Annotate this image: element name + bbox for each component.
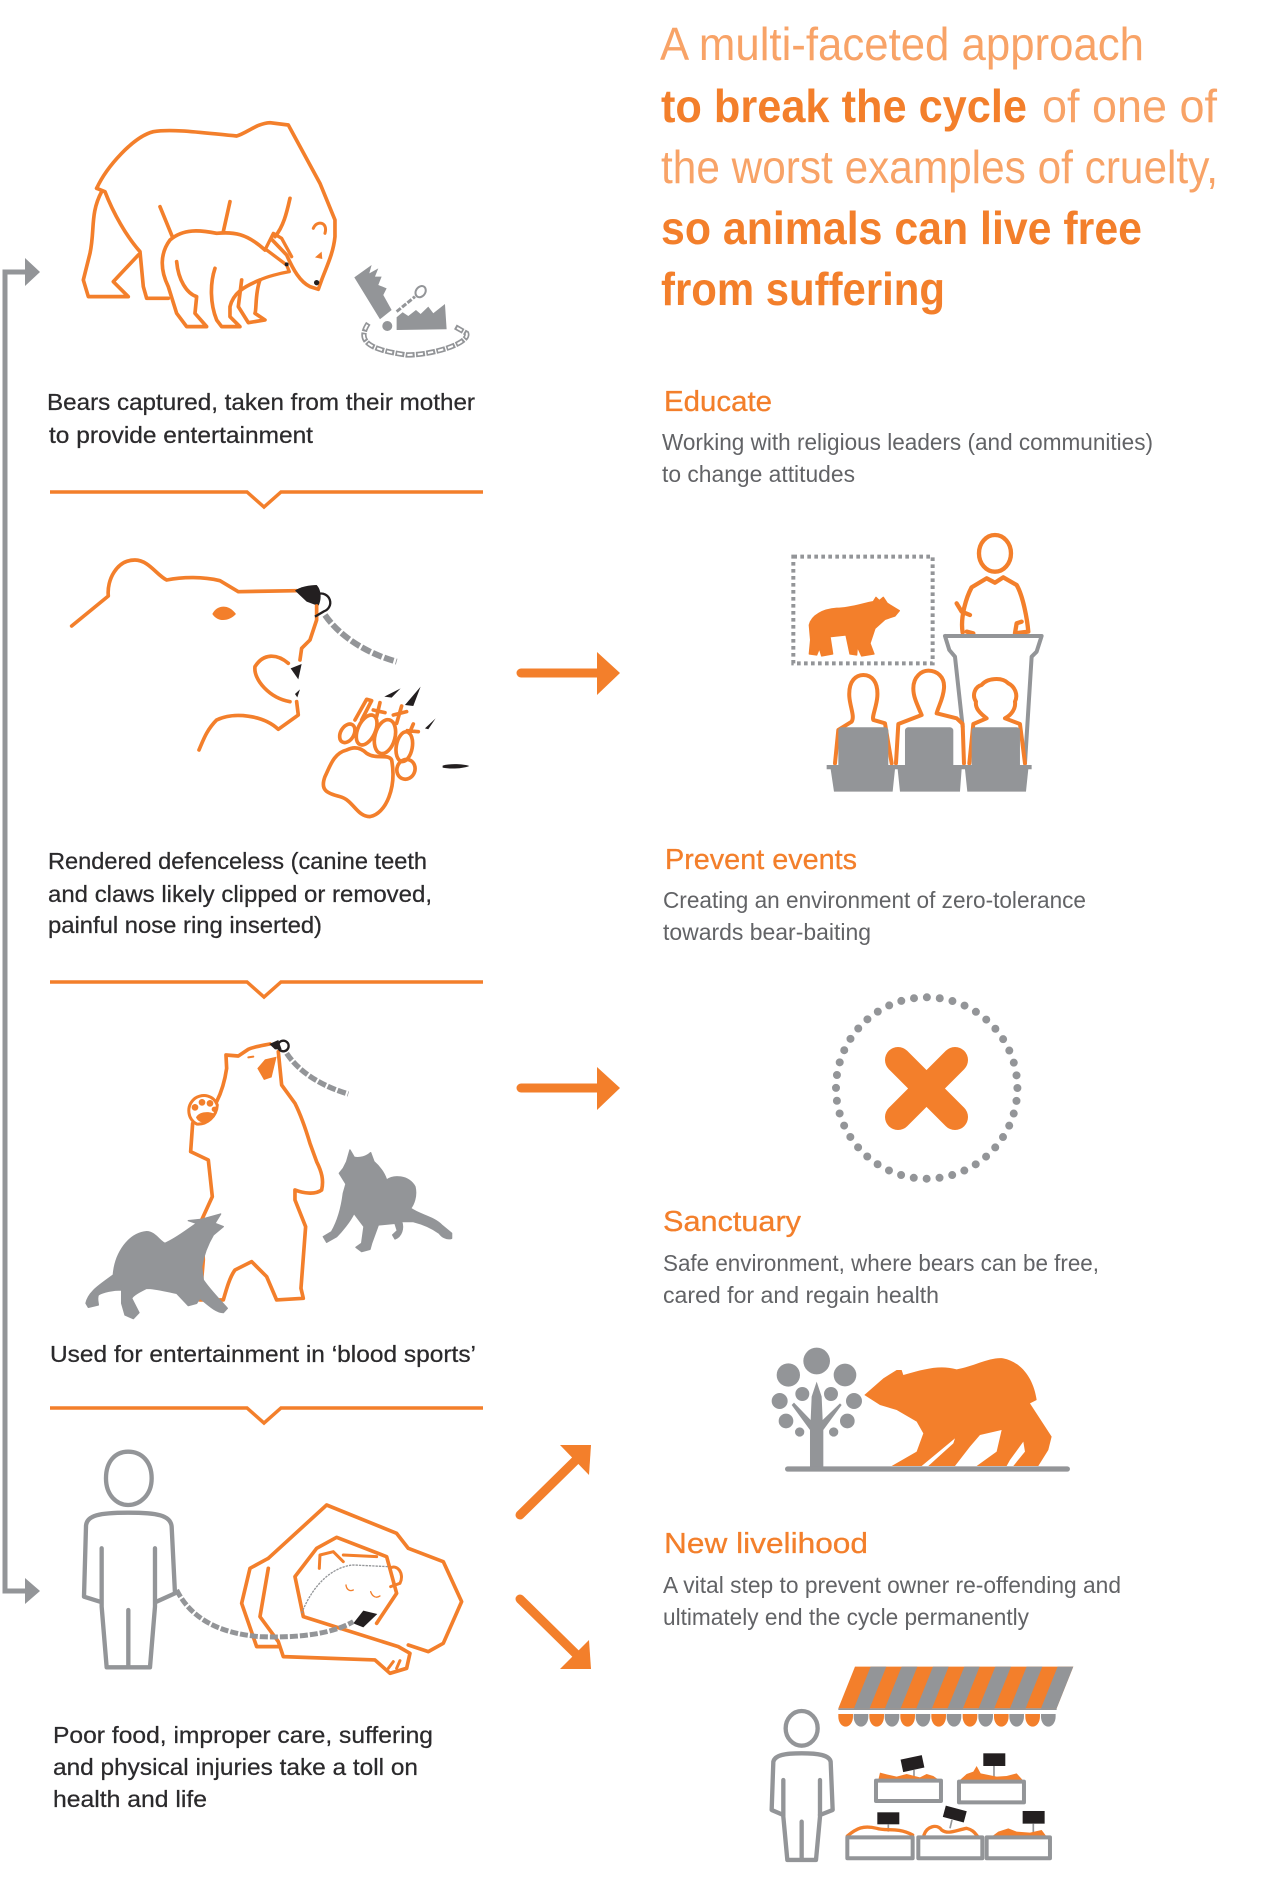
dotted screen (793, 557, 933, 663)
heading: sanctuary: Sanctuary (663, 1206, 802, 1238)
arrow: up right (520, 1445, 591, 1515)
text: sanctuary: cared for and regain health (663, 1282, 939, 1308)
bear (864, 1358, 1052, 1466)
icon: bear head with nose ring (72, 560, 397, 750)
text: prevent events: towards bear-baiting (663, 919, 871, 945)
raised paw (189, 1096, 217, 1124)
caption: toll on health: health and life (53, 1786, 207, 1812)
arrow: down right (520, 1599, 591, 1669)
icon: mother bear and cub (83, 123, 335, 327)
awning fringe (838, 1714, 1056, 1727)
right dog (323, 1150, 452, 1252)
title (660, 18, 1218, 315)
caption: defenceless: painful nose ring inserted) (48, 912, 322, 938)
heading: educate: Educate (664, 386, 772, 418)
icon: bear and tree (772, 1348, 1067, 1469)
ground (788, 1461, 1067, 1477)
text: sanctuary (663, 1250, 1099, 1308)
caption: defenceless: and claws likely clipped or removed, (48, 881, 432, 907)
title: to break the cycle (661, 80, 1027, 132)
text: educate: Working with religious leaders (and communities) (662, 429, 1153, 455)
caption: toll on health (53, 1722, 433, 1812)
title: so animals can live free (661, 202, 1142, 254)
icon: bear trap (354, 265, 467, 355)
caption: defenceless (48, 848, 432, 938)
audience outlines (835, 675, 892, 763)
text: new livelihood: A vital step to prevent owner re-offending and (663, 1572, 1121, 1598)
icon: owner figure (84, 1452, 175, 1667)
tree (772, 1348, 862, 1467)
stallholder (772, 1711, 833, 1860)
arrow: to sanctuary (521, 1067, 620, 1110)
awning (838, 1667, 1073, 1710)
title: the worst examples of cruelty, (661, 141, 1218, 193)
icon: paw with removed claws (323, 687, 469, 817)
title: of one of (1042, 80, 1217, 132)
icon: dotted circle with cross (836, 997, 1017, 1179)
speaker (979, 535, 1011, 572)
caption: captured: Bears captured, taken from their mother (47, 389, 475, 415)
arrow: to prevent events (521, 652, 620, 695)
caption: defenceless: Rendered defenceless (canine teeth (48, 848, 427, 874)
icon: market stall (772, 1667, 1073, 1860)
text: new livelihood: ultimately end the cycle permanently (663, 1604, 1029, 1630)
lectern (945, 636, 1042, 763)
title: from suffering (661, 263, 945, 315)
seats (838, 727, 888, 769)
text: new livelihood (663, 1572, 1121, 1630)
text: educate (662, 429, 1153, 487)
title: A multi-faceted approach (660, 18, 1144, 70)
caption: captured (47, 389, 475, 448)
cycle connector arrow (5, 258, 40, 1604)
caption: toll on health: Poor food, improper care, suffering (53, 1722, 433, 1748)
bear outline (191, 1044, 323, 1300)
produce (878, 1766, 1047, 1837)
text: prevent events: Creating an environment of zero-tolerance (663, 887, 1086, 913)
text: educate: to change attitudes (662, 461, 855, 487)
heading: prevent events: Prevent events (665, 844, 857, 876)
icon: classroom (793, 535, 1042, 792)
caption: blood sports: Used for entertainment in ‘blood sports’ (50, 1341, 476, 1367)
small bear (809, 597, 899, 656)
caption: toll on health: and physical injuries take a toll on (53, 1754, 418, 1780)
text: sanctuary: Safe environment, where bears can be free, (663, 1250, 1099, 1276)
icon: standing bear attacked by dogs (86, 1040, 452, 1319)
crates (847, 1781, 1050, 1858)
left dog (86, 1214, 227, 1319)
icon: curled bear chained (177, 1505, 462, 1673)
price signs (877, 1753, 1045, 1824)
heading: new livelihood: New livelihood (664, 1528, 868, 1560)
text: prevent events (663, 887, 1086, 945)
caption: captured: to provide entertainment (49, 422, 314, 448)
